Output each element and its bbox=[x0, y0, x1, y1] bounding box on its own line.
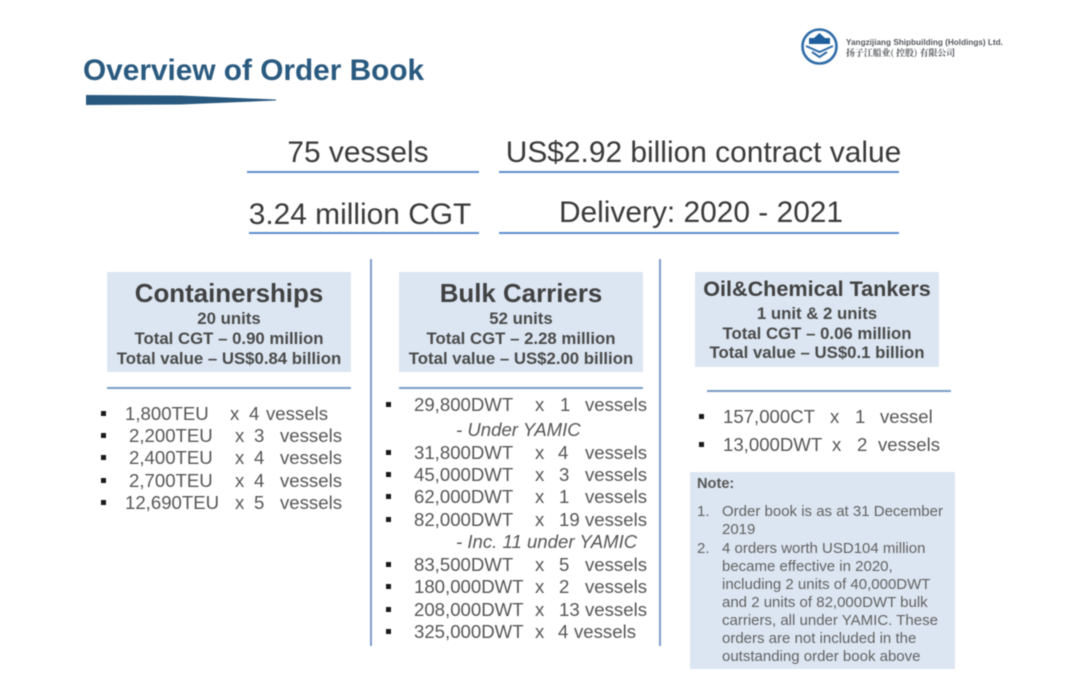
list: containerships: 4 bbox=[254, 470, 264, 491]
list: tankers bbox=[698, 406, 940, 455]
list: bulk carriers: vessels bbox=[585, 394, 647, 415]
list: bulk carriers: 208,000DWT bbox=[414, 599, 524, 620]
bulk carriers stats bbox=[408, 309, 633, 368]
panel: note bbox=[690, 472, 955, 669]
list: bulk carriers: vessels bbox=[585, 464, 647, 485]
list: bulk carriers: 31,800DWT bbox=[414, 442, 513, 463]
list: bulk carriers bbox=[251, 101, 647, 642]
list: containerships: x bbox=[235, 425, 244, 446]
list: bulk carriers: 3 bbox=[559, 464, 569, 485]
list: bulk carriers: x bbox=[535, 509, 544, 530]
icon: ship emblem bbox=[800, 28, 839, 66]
list: bulk carriers: 29,800DWT bbox=[414, 394, 513, 415]
note heading: Note: bbox=[697, 476, 734, 492]
bulk carriers stats: Total value – US$2.00 billion bbox=[409, 349, 633, 368]
list: bulk carriers: x bbox=[535, 486, 544, 507]
list: bulk carriers: vessels bbox=[585, 509, 647, 530]
heading: bulk carriers: Bulk Carriers bbox=[440, 280, 602, 308]
list: bulk carriers: 325,000DWT bbox=[414, 621, 524, 642]
list: bulk carriers: vessels bbox=[585, 599, 647, 620]
list: bulk carriers: 13 bbox=[559, 599, 580, 620]
list: bulk carriers: x bbox=[535, 599, 544, 620]
containerships stats bbox=[116, 309, 341, 368]
list: bulk carriers: vessels bbox=[585, 486, 647, 507]
note 2: 2. bbox=[697, 540, 710, 557]
list: tankers: 13,000DWT bbox=[723, 434, 822, 455]
list: bulk carriers: x bbox=[535, 394, 544, 415]
list: bulk carriers: 2 bbox=[559, 576, 569, 597]
tankers stats: Total value – US$0.1 billion bbox=[709, 343, 925, 362]
list: tankers: x bbox=[832, 434, 841, 455]
list: bulk carriers: x bbox=[535, 442, 544, 463]
panel: bulk carriers bbox=[399, 272, 643, 372]
list: containerships bbox=[100, 101, 342, 513]
containerships stats: 20 units bbox=[197, 309, 261, 328]
bulk carriers stats: 52 units bbox=[489, 309, 553, 328]
list: bulk carriers: - Under YAMIC bbox=[456, 419, 581, 440]
list: bulk carriers: 45,000DWT bbox=[414, 464, 513, 485]
stat: delivery: Delivery: 2020 - 2021 bbox=[559, 196, 843, 229]
list: bulk carriers: 62,000DWT bbox=[414, 486, 513, 507]
list: containerships: 12,690TEU bbox=[125, 492, 219, 513]
list: containerships: 3 bbox=[254, 425, 264, 446]
list: bulk carriers: 83,500DWT bbox=[414, 554, 513, 575]
list: tankers: 157,000CT bbox=[723, 406, 815, 427]
heading: containerships: Containerships bbox=[135, 280, 323, 308]
list: bulk carriers: 1 bbox=[560, 394, 570, 415]
stat: contract value: US$2.92 billion contract value bbox=[506, 136, 901, 169]
list: bulk carriers: x bbox=[535, 554, 544, 575]
panel: oil and chemical tankers bbox=[695, 272, 939, 367]
list: bulk carriers: 180,000DWT bbox=[414, 576, 524, 597]
list: containerships: 1,800TEU bbox=[125, 403, 209, 424]
list: containerships: 4 bbox=[249, 403, 259, 424]
list: containerships: vessels bbox=[280, 447, 342, 468]
list: bulk carriers: x bbox=[535, 576, 544, 597]
list: bulk carriers: vessels bbox=[574, 621, 636, 642]
stat: vessels: 75 vessels bbox=[287, 136, 429, 169]
heading: tankers: Oil&Chemical Tankers bbox=[703, 276, 931, 301]
list: containerships: vessels bbox=[280, 425, 342, 446]
list: containerships: x bbox=[235, 470, 244, 491]
company name chinese: 扬子江船业( 控股) 有限公司 bbox=[846, 46, 955, 59]
list: bulk carriers: vessels bbox=[585, 576, 647, 597]
containerships stats: Total value – US$0.84 billion bbox=[117, 349, 341, 368]
list: containerships: vessels bbox=[280, 492, 342, 513]
list: containerships: x bbox=[235, 447, 244, 468]
list: containerships: 2,700TEU bbox=[129, 470, 213, 491]
bulk carriers stats: Total CGT – 2.28 million bbox=[426, 329, 615, 348]
list: bulk carriers: 19 bbox=[559, 509, 580, 530]
list: bulk carriers: vessels bbox=[585, 442, 647, 463]
list: containerships: vessels bbox=[266, 403, 328, 424]
list: containerships: vessels bbox=[280, 470, 342, 491]
panel: containerships bbox=[107, 272, 351, 372]
note 1: 1. bbox=[697, 503, 710, 520]
list: tankers: vessels bbox=[878, 434, 940, 455]
company name: Yangzijiang Shipbuilding (Holdings) Ltd. bbox=[846, 38, 1003, 47]
note 2: 4 orders worth USD104 million became effective in 2020, including 2 units of 40,000DWT and 2 units of 82,000DWT bulk carriers, all under YAMIC. These orders are not included in the outstanding order book above bbox=[722, 540, 938, 664]
list: bulk carriers: vessels bbox=[585, 554, 647, 575]
list: tankers: x bbox=[830, 406, 839, 427]
list: bulk carriers: - Inc. 11 under YAMIC bbox=[456, 531, 637, 552]
list: containerships: 2,400TEU bbox=[129, 447, 213, 468]
tankers stats: Total CGT – 0.06 million bbox=[722, 324, 911, 342]
list: containerships: 5 bbox=[254, 492, 264, 513]
logo: Yangzijiang Shipbuilding bbox=[800, 28, 1003, 66]
list: bulk carriers: 4 bbox=[558, 442, 568, 463]
list: containerships: x bbox=[235, 492, 244, 513]
tankers stats: 1 unit & 2 units bbox=[757, 304, 877, 323]
list: containerships: 2,200TEU bbox=[129, 425, 213, 446]
list: tankers: 1 bbox=[855, 406, 865, 427]
list: tankers: 2 bbox=[857, 434, 867, 455]
list: containerships: x bbox=[230, 403, 239, 424]
containerships stats: Total CGT – 0.90 million bbox=[134, 329, 323, 348]
list: bulk carriers: 5 bbox=[559, 554, 569, 575]
stat: CGT: 3.24 million CGT bbox=[249, 198, 471, 231]
list: bulk carriers: 4 bbox=[558, 621, 568, 642]
list: bulk carriers: 82,000DWT bbox=[414, 509, 513, 530]
list: bulk carriers: x bbox=[535, 464, 544, 485]
list: tankers: vessel bbox=[880, 406, 933, 427]
title: Overview of Order Book bbox=[83, 54, 424, 87]
note 1: Order book is as at 31 December 2019 bbox=[722, 502, 943, 538]
list: containerships: 4 bbox=[254, 447, 264, 468]
title underline swoosh bbox=[85, 94, 277, 106]
tankers stats bbox=[709, 304, 925, 362]
list: bulk carriers: 1 bbox=[559, 486, 569, 507]
list: bulk carriers: x bbox=[535, 621, 544, 642]
